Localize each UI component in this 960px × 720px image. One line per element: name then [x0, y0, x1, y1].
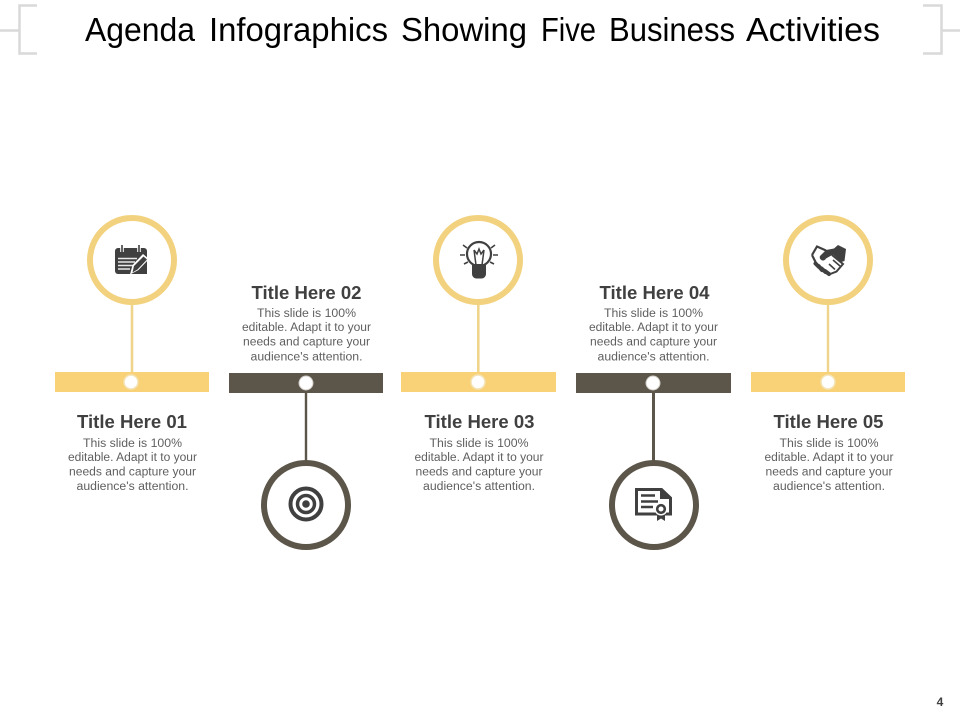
icon: handshake: [812, 245, 846, 274]
node 05: [821, 375, 835, 389]
text 01: editable. Adapt it to your: [68, 452, 197, 464]
text 02: audience's attention.: [250, 352, 362, 364]
connector 04: [652, 392, 655, 461]
left title bracket: [0, 6, 37, 54]
ring 05: [786, 218, 870, 302]
text 05: audience's attention.: [773, 481, 885, 493]
heading 03: Title Here 03: [424, 412, 534, 432]
ring 01: [90, 218, 174, 302]
icon: light bulb: [460, 242, 498, 278]
right title bracket: [923, 6, 960, 54]
text 02: editable. Adapt it to your: [242, 322, 371, 334]
connector 05: [827, 303, 829, 373]
bar 05: [751, 372, 905, 392]
ring 04: [612, 463, 696, 547]
connector 02: [305, 392, 307, 461]
title: Infographics: [209, 11, 388, 48]
text 05: This slide is 100%: [780, 438, 878, 450]
text 05: editable. Adapt it to your: [764, 452, 894, 464]
node 03: [471, 375, 485, 389]
step 05: [751, 218, 905, 493]
text 02: This slide is 100%: [257, 308, 356, 320]
node 01: [124, 375, 138, 389]
text 04: needs and capture your: [590, 336, 717, 348]
heading 04: Title Here 04: [600, 283, 710, 303]
step 01: [55, 218, 209, 493]
connector 01: [131, 303, 133, 373]
text 04: editable. Adapt it to your: [589, 322, 718, 334]
text 03: This slide is 100%: [430, 438, 528, 450]
title: Activities: [746, 11, 880, 48]
page number: 4: [937, 695, 944, 709]
text 04: [589, 308, 718, 364]
node 04: [646, 376, 660, 390]
heading 01: Title Here 01: [77, 412, 187, 432]
title: Agenda: [85, 11, 196, 48]
text 03: needs and capture your: [416, 466, 543, 478]
heading 02: Title Here 02: [252, 283, 362, 303]
ring 02: [264, 463, 348, 547]
text 02: [242, 308, 371, 364]
icon: calendar with pencil: [115, 245, 149, 274]
heading 05: Title Here 05: [774, 412, 884, 432]
text 03: editable. Adapt it to your: [414, 452, 544, 464]
text 03: [414, 438, 544, 493]
step 02: [229, 283, 383, 547]
bar 03: [401, 372, 556, 392]
text 01: audience's attention.: [76, 481, 188, 493]
step 04: [576, 283, 731, 547]
connector 03: [477, 303, 480, 373]
icon: certificate: [636, 488, 672, 521]
text 04: This slide is 100%: [604, 308, 703, 320]
text 04: audience's attention.: [598, 352, 710, 364]
title: Business: [609, 11, 735, 48]
step 03: [401, 218, 556, 493]
bar 02: [229, 373, 383, 393]
bar 01: [55, 372, 209, 392]
text 01: [68, 438, 197, 493]
text 03: audience's attention.: [423, 481, 535, 493]
title: Five: [541, 11, 596, 48]
title: [85, 11, 880, 48]
text 02: needs and capture your: [243, 336, 370, 348]
text 05: needs and capture your: [766, 466, 893, 478]
ring 03: [436, 218, 520, 302]
icon: target: [290, 488, 322, 520]
text 01: This slide is 100%: [83, 438, 182, 450]
bar 04: [576, 373, 731, 393]
text 01: needs and capture your: [69, 466, 196, 478]
text 05: [764, 438, 894, 493]
title: Showing: [401, 11, 527, 48]
node 02: [299, 376, 313, 390]
